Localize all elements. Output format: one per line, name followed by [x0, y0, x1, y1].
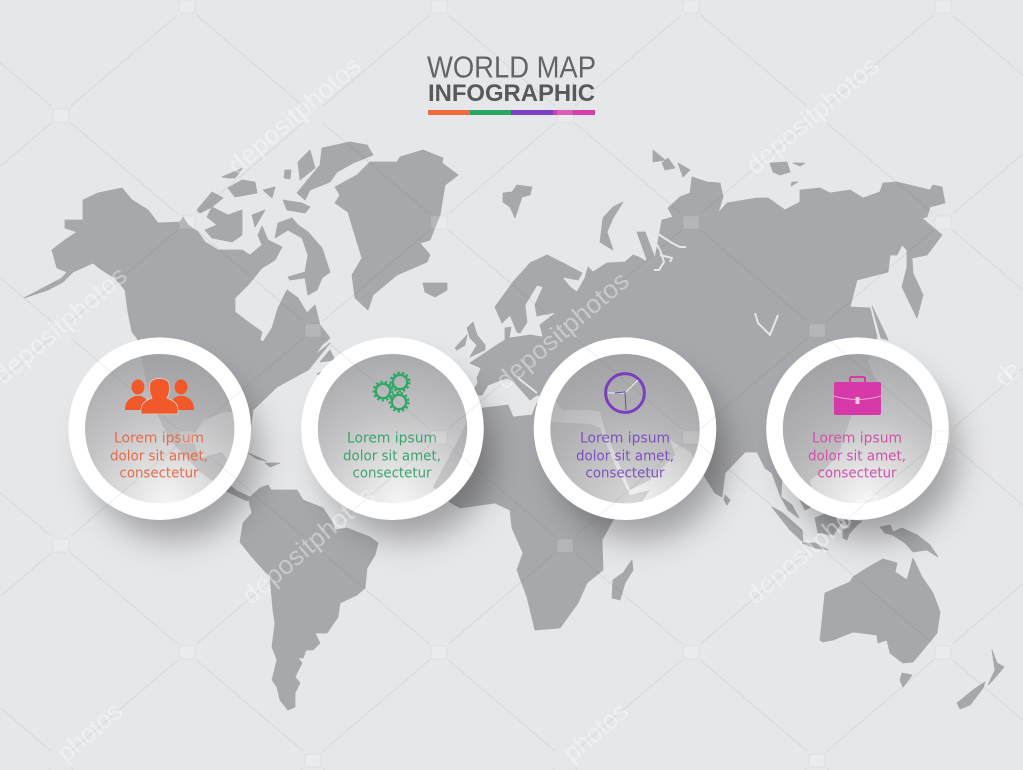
watermark text: photos [557, 696, 634, 768]
text: briefcase caption [808, 430, 906, 482]
Australia [820, 558, 940, 663]
text: gears caption [343, 430, 441, 482]
watermark text: depositphotos [222, 50, 367, 180]
text: people caption: dolor sit amet, [110, 448, 208, 464]
title: INFOGRAPHIC [428, 80, 595, 107]
Caribbean islands [248, 453, 280, 467]
text: clock caption [576, 430, 674, 482]
Sri Lanka [724, 495, 730, 505]
watermark text: photos [51, 696, 128, 768]
text: briefcase caption: consectetur [818, 466, 897, 482]
Inland seas and estuaries [518, 232, 778, 393]
title: WORLD MAP [427, 50, 596, 84]
Eurasia [470, 177, 945, 518]
circle shadows [88, 368, 958, 540]
Novaya Zemlya [600, 202, 623, 250]
title [427, 50, 596, 107]
UK and Ireland [455, 322, 485, 357]
text: people caption: consectetur [120, 466, 199, 482]
text: clock caption: Lorem ipsum [580, 430, 670, 446]
watermark text: depositphotos [740, 480, 885, 610]
Arctic Russian islands [653, 150, 805, 186]
Svalbard [503, 185, 532, 218]
text: gears caption: Lorem ipsum [347, 430, 437, 446]
panel: clock [534, 337, 716, 520]
text: briefcase caption: dolor sit amet, [808, 448, 906, 464]
panel: people [68, 337, 251, 520]
icon: briefcase [834, 377, 881, 415]
panel: briefcase [766, 337, 949, 520]
watermark text: depositphotos [740, 50, 885, 180]
text: gears caption: consectetur [352, 466, 432, 482]
South America [237, 485, 378, 710]
text: clock caption: dolor sit amet, [576, 448, 674, 464]
watermark text: depositphotos [236, 480, 381, 610]
Greenland [335, 150, 458, 310]
watermark text: depositphotos [490, 265, 635, 395]
Africa [433, 403, 650, 630]
text: people caption [110, 430, 208, 482]
text: clock caption: consectetur [586, 466, 665, 482]
Canadian Arctic islands [197, 142, 373, 378]
title colour bar [428, 110, 595, 115]
icon: gears [374, 373, 409, 411]
New Guinea [880, 525, 938, 557]
text: gears caption: dolor sit amet, [343, 448, 441, 464]
text: people caption: Lorem ipsum [114, 430, 204, 446]
panel: gears [301, 338, 484, 520]
icon: clock [606, 374, 644, 412]
Indonesian and Philippine islands [772, 507, 862, 550]
Sakhalin [872, 306, 888, 340]
Madagascar [612, 560, 633, 600]
text: briefcase caption: Lorem ipsum [812, 430, 902, 446]
Iceland [423, 283, 447, 297]
New Zealand [957, 650, 1004, 709]
icon: people [125, 378, 194, 414]
world map [24, 142, 1004, 710]
North America [24, 188, 330, 501]
Tasmania [900, 673, 912, 687]
